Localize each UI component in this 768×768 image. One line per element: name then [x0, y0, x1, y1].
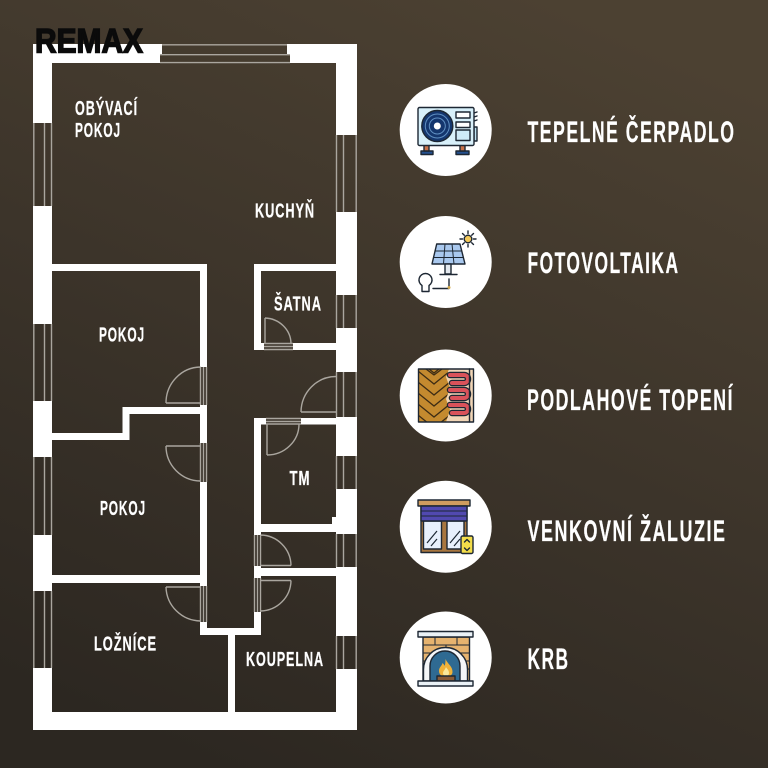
- room label: obývací pokoj: POKOJ: [75, 119, 121, 142]
- logo: REMAX: [35, 22, 143, 60]
- icon: fireplace: [400, 612, 492, 704]
- windows: [34, 45, 356, 669]
- icon: heat pump: [400, 84, 492, 176]
- icon: exterior blinds: [400, 481, 492, 573]
- floor plan: [33, 44, 357, 730]
- room label: TM: TM: [290, 467, 310, 490]
- room label: koupelna: KOUPELNA: [246, 648, 324, 671]
- room label: pokoj 2: POKOJ: [100, 497, 146, 520]
- room label: obývací pokoj: OBÝVACÍ: [75, 96, 138, 120]
- room label: kuchyň: KUCHYŇ: [255, 198, 315, 222]
- feature label: krb: KRB: [528, 643, 570, 676]
- room label: šatna: ŠATNA: [274, 292, 322, 316]
- icon: solar panel: [400, 216, 492, 308]
- icon: underfloor heating: [400, 349, 492, 442]
- room label: ložnice: LOŽNÍCE: [94, 632, 157, 656]
- walls: [33, 44, 357, 730]
- doors: [166, 318, 336, 622]
- room label: obývací pokoj: [75, 96, 138, 142]
- room label: pokoj: POKOJ: [99, 324, 145, 346]
